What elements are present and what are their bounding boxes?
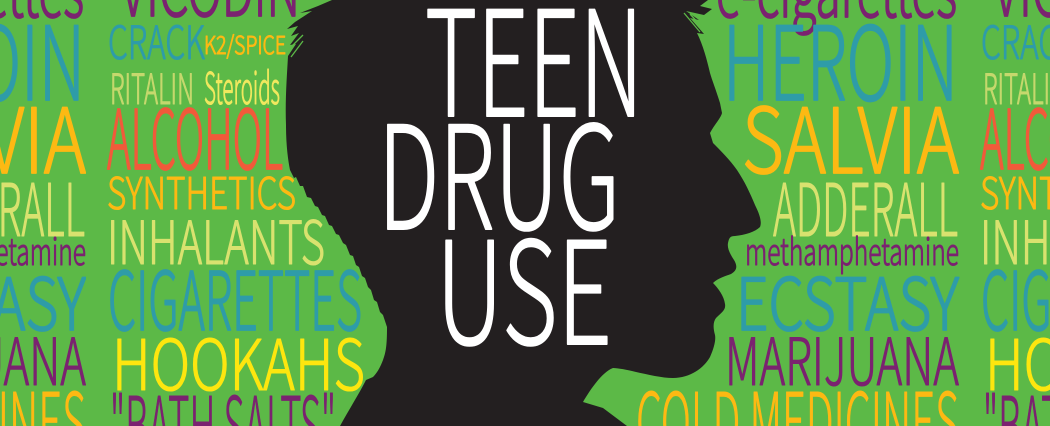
drug words: main field: RITALIN <box>110 56 194 117</box>
drug words: main field: CIGARETTES <box>108 237 362 354</box>
drug words: main field: INHALANTS <box>107 195 325 282</box>
title: DRUG <box>378 64 620 271</box>
title <box>378 0 643 385</box>
drug words: main field: ECSTASY <box>736 246 959 351</box>
drug words: main field: HOOKAHS <box>112 310 365 411</box>
drug words: right edge repeat <box>980 0 1050 426</box>
drug words: main field: ALCOHOL <box>107 74 283 193</box>
head silhouette <box>286 0 761 426</box>
drug words: main field: SALVIA <box>742 69 959 199</box>
drug words: main field: K2/SPICE <box>204 26 286 62</box>
hair highlights <box>291 13 702 57</box>
drug words: main field: SYNTHETICS <box>107 158 296 222</box>
drug words: main field: CRACK <box>108 7 205 73</box>
drug words: left edge repeat <box>0 0 86 426</box>
drug words: main field: Steroids <box>204 53 280 117</box>
title: USE <box>436 179 612 385</box>
